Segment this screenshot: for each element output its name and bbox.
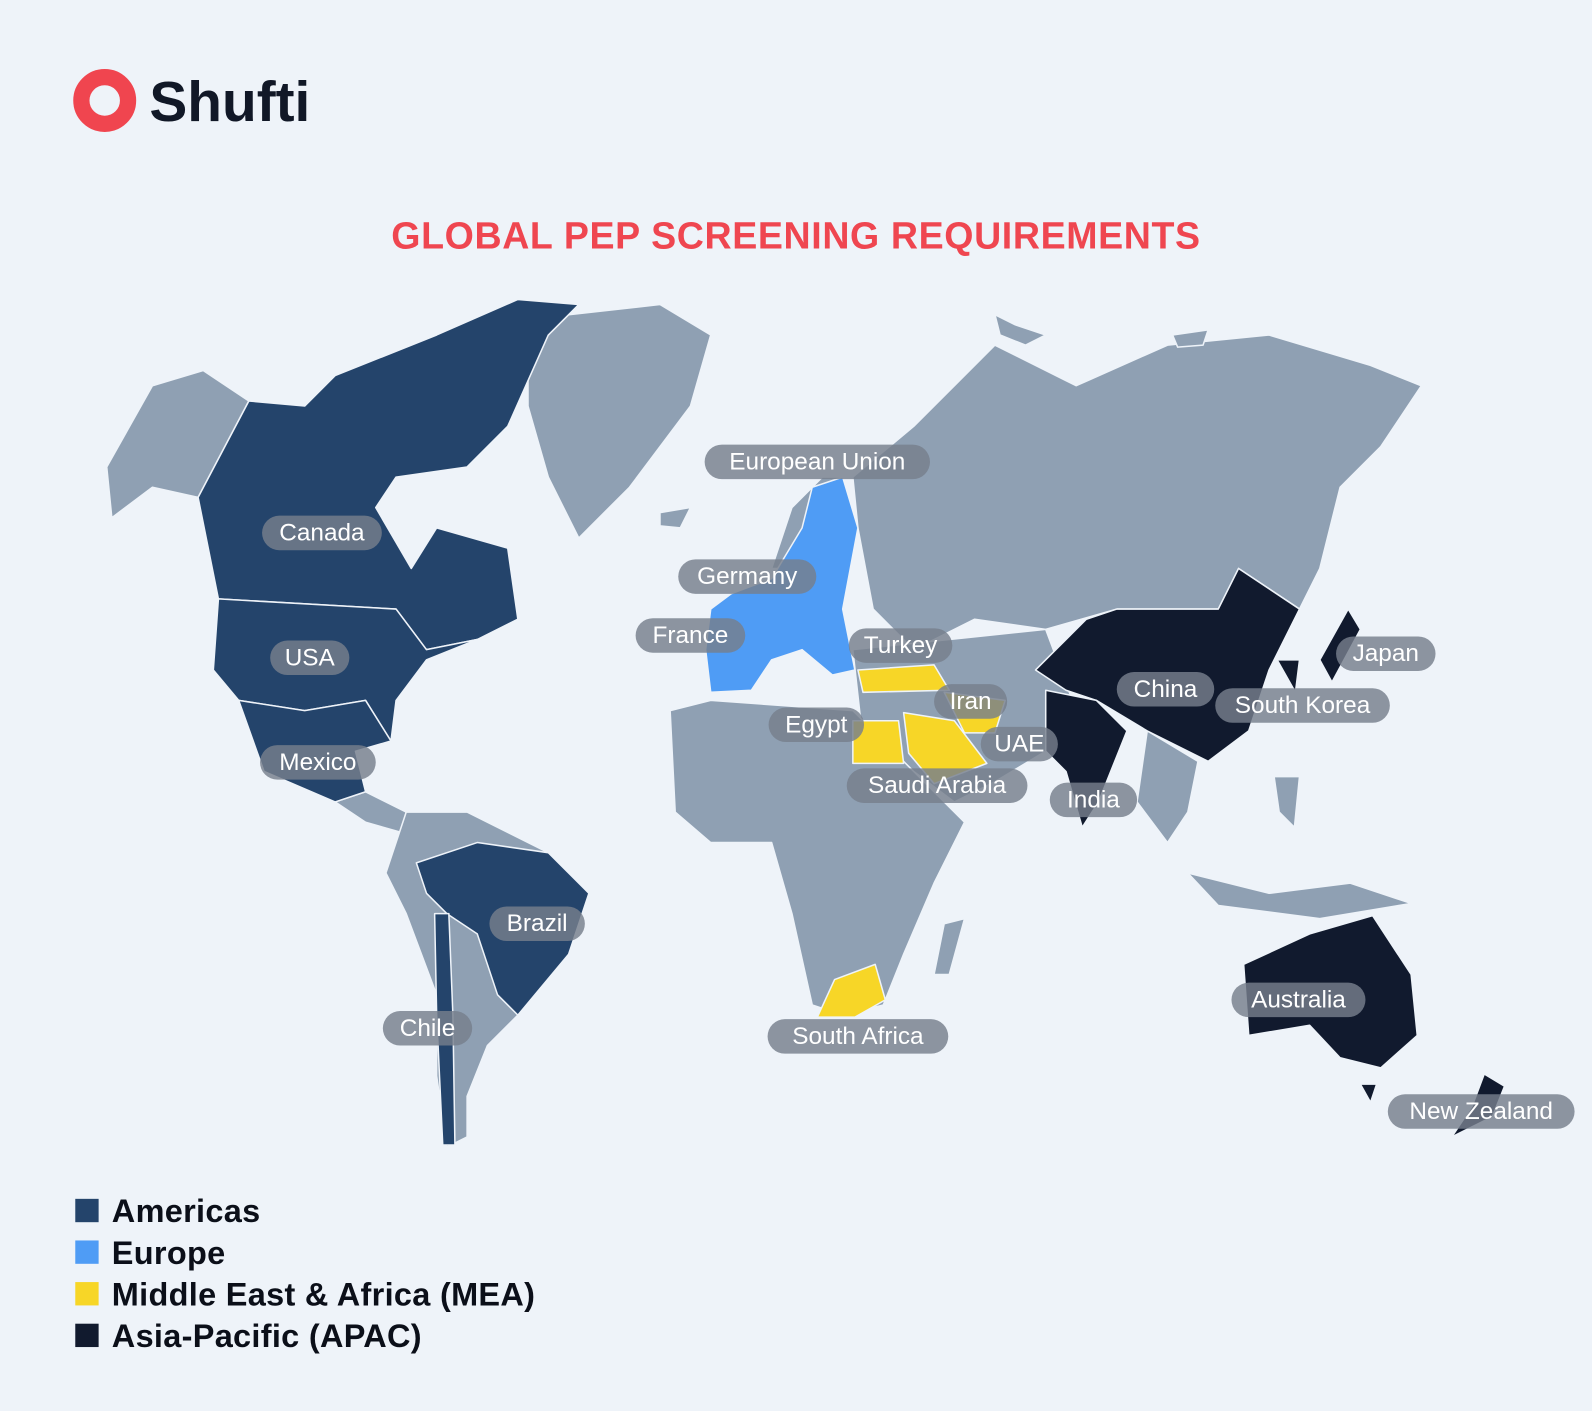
label: Canada: Canada — [279, 519, 365, 546]
label: USA — [270, 641, 349, 675]
label: Japan — [1336, 636, 1436, 671]
label: European Union — [705, 445, 930, 479]
label: Germany — [678, 559, 816, 594]
label: Chile: Chile — [400, 1015, 455, 1042]
label: Turkey — [849, 628, 952, 663]
region: europe — [706, 477, 858, 692]
legend: APAC: Asia-Pacific (APAC) — [112, 1318, 422, 1354]
label: Saudi Arabia — [847, 768, 1027, 803]
label: USA: USA — [285, 644, 336, 671]
label: South Korea — [1215, 688, 1390, 723]
label: New Zealand: New Zealand — [1409, 1098, 1553, 1125]
label: Brazil: Brazil — [507, 910, 568, 937]
label: France — [636, 618, 745, 653]
legend: Europe: Europe — [112, 1235, 226, 1271]
label: France: France — [653, 622, 728, 649]
label: South Korea: South Korea — [1235, 692, 1371, 719]
label: Turkey: Turkey — [864, 632, 938, 659]
legend: Americas: Americas — [112, 1193, 260, 1229]
label: Germany: Germany — [697, 563, 798, 590]
logo: Shufti — [149, 71, 310, 134]
label: Australia — [1231, 983, 1365, 1017]
label: New Zealand — [1388, 1094, 1575, 1129]
label: European Union: European Union — [729, 448, 905, 475]
label: UAE — [981, 727, 1058, 761]
label: Brazil — [489, 906, 585, 941]
label: Egypt: Egypt — [785, 711, 848, 738]
label: South Africa: South Africa — [792, 1023, 924, 1050]
label: Japan: Japan — [1353, 640, 1419, 667]
label: Egypt — [769, 708, 864, 742]
label: Iran — [934, 684, 1007, 719]
region: americas — [198, 299, 589, 1145]
label: China — [1117, 672, 1214, 707]
region: apac — [1036, 568, 1505, 1137]
world map — [107, 299, 1505, 1147]
label: UAE: UAE — [994, 731, 1044, 758]
label: Iran: Iran — [950, 688, 992, 715]
label: Saudi Arabia: Saudi Arabia — [868, 772, 1007, 799]
legend: MEA: Middle East & Africa (MEA) — [112, 1276, 535, 1312]
label: India: India — [1067, 786, 1120, 813]
label: Australia: Australia — [1251, 986, 1346, 1013]
label: Canada — [262, 516, 382, 550]
label: China: China — [1134, 676, 1198, 703]
label: Mexico — [260, 745, 376, 780]
label: Mexico: Mexico — [279, 749, 356, 776]
country labels — [260, 445, 1575, 1129]
title: GLOBAL PEP SCREENING REQUIREMENTS — [391, 215, 1201, 257]
label: Chile — [383, 1011, 472, 1046]
label: South Africa — [768, 1019, 948, 1054]
label: India — [1050, 783, 1137, 817]
region: gray land — [107, 305, 1421, 1147]
region: mea — [817, 665, 1005, 1017]
legend — [75, 1193, 535, 1354]
